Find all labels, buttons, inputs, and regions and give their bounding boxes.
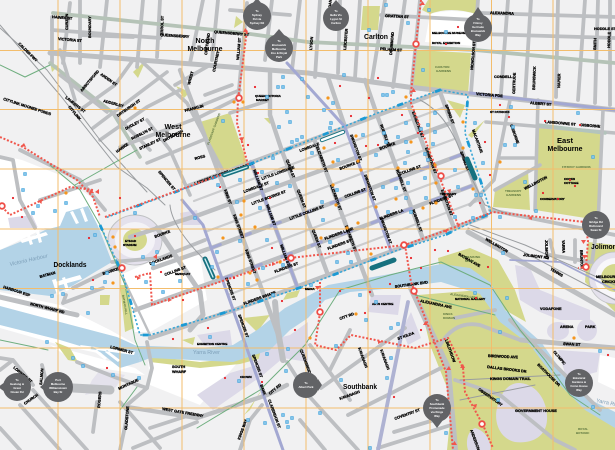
street names CBD cross: WILLIAM ST xyxy=(252,169,264,192)
route: St Kilda Road xyxy=(405,245,453,450)
venue names: COTTAGE xyxy=(564,181,578,185)
red markers xyxy=(13,27,608,397)
park: Flagstaff Gardens xyxy=(200,113,247,170)
venue names: MARKET xyxy=(256,98,269,102)
roads: north horizontals xyxy=(50,10,615,110)
street names west: STANLEY ST xyxy=(139,137,162,151)
station: Parliament xyxy=(467,159,475,178)
pin: Williamstown: Geelong & xyxy=(10,382,24,386)
street names docklands and south xyxy=(3,237,615,450)
label: North Melbourne: Melbourne xyxy=(188,44,222,53)
pin: Lygon Street Carlton xyxy=(323,0,349,31)
street names CBD cross: WILLIAM ST xyxy=(265,204,277,227)
street names CBD cross: RUSSELL ST xyxy=(411,209,423,233)
street names west: CITYLINK MOONEE PONDS xyxy=(3,97,52,117)
label: West Melbourne: West xyxy=(164,122,182,131)
venue names: ROYAL EXHIBITION xyxy=(432,41,460,45)
venue names xyxy=(123,31,578,379)
street names docklands and south: LORIMER ST xyxy=(12,366,33,384)
pin: South Yarra: Gardens & xyxy=(572,380,586,384)
street names CBD long: FLINDERS ST xyxy=(274,261,299,274)
street names CBD long: LATROBE ST WEST xyxy=(194,170,230,186)
pin: Richmond: Swan St xyxy=(591,228,602,232)
street names north east: GRATTAN ST xyxy=(385,14,410,19)
pin: Richmond: Bridge Rd xyxy=(589,220,603,224)
street names CBD cross: SPENCER ST xyxy=(224,277,236,302)
route: William St north xyxy=(237,30,248,165)
street names docklands and south: QUEENSBRIDGE xyxy=(299,349,314,380)
street names docklands and south: KAVANAGH xyxy=(357,347,368,369)
pin: Williamstown: Ocean Rd xyxy=(10,390,24,394)
street names north east: NAPIER xyxy=(557,73,562,88)
park names: ROYAL xyxy=(578,427,588,431)
park: small reserves xyxy=(243,315,270,332)
street names west xyxy=(3,14,250,192)
stadium: MCG xyxy=(589,252,615,304)
pin: Lygon Street Carlton: Carlton xyxy=(331,21,341,25)
street names docklands and south: LINLITHGOW xyxy=(444,339,456,363)
pin: Lygon Street: Park xyxy=(276,55,282,59)
pin: Port Melbourne: Bay St xyxy=(54,390,62,394)
street names north east: ALBERT ST xyxy=(530,101,552,107)
street names docklands and south: KINGS WAY xyxy=(237,418,248,440)
pin: Port Melbourne xyxy=(40,372,73,402)
pin: Lygon Street: Melbourne xyxy=(272,47,287,51)
street names CBD cross: EXHIBITION ST xyxy=(440,189,454,217)
park: Birrarung Marr xyxy=(438,248,526,322)
park names: FLAGSTAFF GARDENS xyxy=(206,113,221,145)
street names CBD long: LA TROBE ST xyxy=(229,161,255,174)
venue names: NATIONAL GALLERY xyxy=(455,297,485,301)
route: Docklands south xyxy=(2,187,93,215)
route: Treasury to Jolimont xyxy=(458,212,588,268)
station: Melbourne Central xyxy=(322,132,343,140)
label: North Melbourne: North xyxy=(196,36,215,45)
venue names: CROWN xyxy=(240,375,252,379)
route: Carlton and Exhibition xyxy=(411,0,458,225)
park names: GARDENS xyxy=(436,69,451,73)
street names CBD cross: EXHIBITION ST xyxy=(424,147,438,175)
street names docklands and south: SOUTHBANK BVD xyxy=(395,280,428,289)
street names CBD long: COLLINS ST xyxy=(344,187,367,199)
pin: Williamstown: To xyxy=(15,378,19,382)
street names north east: GISBORNE xyxy=(580,123,601,129)
street names CBD cross: SPENCER ST xyxy=(251,354,263,379)
street names west: FRANKLIN xyxy=(184,104,204,113)
street names west: ADDERLEY xyxy=(103,99,124,108)
street names CBD cross: ELIZABETH ST xyxy=(315,146,328,174)
pin: Lygon Street Carlton: Bella Vis xyxy=(330,13,342,17)
street names CBD cross: QUEEN ST xyxy=(296,189,307,209)
park: Yarra Park xyxy=(585,242,615,312)
pin: Lygon Street Carlton: Lygon St xyxy=(330,17,342,21)
venue names: TREASURY xyxy=(440,192,456,196)
street names west: CITYLINK xyxy=(67,105,82,121)
venue names: MEDIA xyxy=(305,287,316,291)
street names docklands and south: MONTAGUE xyxy=(118,378,140,391)
street names docklands and south: GOVERNMENT HOUSE xyxy=(515,409,557,413)
street names west: CHETWYND xyxy=(204,33,211,55)
pin: Albert Park: To xyxy=(304,381,308,385)
park: Argyle Square xyxy=(361,6,380,30)
pin: Albert Park xyxy=(293,372,322,398)
pin: Smith Street: Fitzroy xyxy=(473,21,483,25)
label: North Melbourne xyxy=(188,36,222,53)
street names north east: ALEXANDRA xyxy=(490,11,514,16)
park names: BOTANIC xyxy=(576,431,590,435)
street names docklands and south: CITY RD xyxy=(268,383,282,396)
street names docklands and south: OLYMPIC xyxy=(552,350,566,366)
street names west: LAURENS ST xyxy=(64,96,86,114)
pin: St Kilda xyxy=(423,394,451,428)
street names north east: VICTORIA PDE xyxy=(476,92,503,98)
street names docklands and south: JOLIMONT xyxy=(544,240,549,260)
street names west: DUDLEY ST xyxy=(125,117,146,131)
street names docklands and south: WEST GATE FREEWAY xyxy=(162,407,204,418)
label: Yarra River: Yarra River xyxy=(193,350,220,356)
pin: St Kilda: Promenade xyxy=(429,406,445,410)
street names docklands and south: VODAFONE xyxy=(540,307,562,311)
street names north east: LYGON xyxy=(309,36,314,50)
park: Carlton Gardens north xyxy=(422,0,478,14)
street names west: DRYBURGH ST xyxy=(116,98,142,118)
lilac precinct zones xyxy=(8,210,600,450)
roads: West Melbourne xyxy=(50,50,270,195)
pin: St Kilda: Southbank xyxy=(430,402,445,406)
street names docklands and south: BRUNTON xyxy=(579,250,584,269)
pin: South Yarra: Como House xyxy=(570,384,588,388)
lake: Government House grounds xyxy=(496,383,547,442)
street names CBD long: LITTLE BOURKE ST xyxy=(251,190,287,206)
street names docklands and south: YARRA xyxy=(561,240,565,253)
street names north east: HODDLE xyxy=(607,31,612,48)
venue names: COOKS xyxy=(564,177,575,181)
street names CBD long xyxy=(154,141,454,306)
street names north east: MACARTHUR xyxy=(471,129,483,154)
street names CBD long: LONSDALE ST xyxy=(243,181,270,194)
street names CBD cross: SWANSTON ST xyxy=(363,174,377,202)
street names CBD long: BOURKE xyxy=(154,229,171,239)
water: Victoria Harbour and Yarra River xyxy=(0,206,615,428)
street names CBD cross: RUSSELL ST xyxy=(395,169,407,193)
pin: Lygon Street Carlton: To xyxy=(334,9,338,13)
roads: CBD cross streets xyxy=(180,70,486,340)
lilac sports blocks xyxy=(515,265,590,320)
street names docklands and south: JOLIMONT RD xyxy=(523,253,550,260)
roads: Docklands xyxy=(0,150,205,335)
street names north east: CONDELL xyxy=(494,75,513,79)
pin: Richmond: Richmond xyxy=(589,224,603,228)
street names CBD cross: KING ST xyxy=(223,189,232,205)
street names docklands and south: LORIMER ST xyxy=(110,345,134,355)
route: La Trobe xyxy=(105,165,248,217)
street names west: BOUNDARY xyxy=(88,16,92,38)
street names west: ERROL ST xyxy=(160,15,165,35)
street names docklands and south: WHARF xyxy=(172,370,187,374)
water labels xyxy=(9,253,615,410)
street names CBD long: LITTLE COLLINS ST xyxy=(289,204,325,221)
street names CBD long: FLINDERS WHARF xyxy=(243,290,277,306)
pin: Sydney Road xyxy=(243,0,271,30)
park names: DOMAIN xyxy=(443,316,455,320)
pin: St Kilda: Way xyxy=(434,414,440,418)
street names west: VICTORIA ST xyxy=(58,37,83,43)
pin: Sydney Road: Sydney Rd xyxy=(250,21,265,25)
pin: Smith Street: Way xyxy=(475,33,481,37)
pin: Richmond xyxy=(582,211,610,239)
street names docklands and south: ARENA xyxy=(560,325,574,329)
street names west: COURTNEY xyxy=(212,50,221,72)
pin: Smith Street xyxy=(464,7,492,42)
street names west: ABBOTSFORD xyxy=(80,69,100,93)
street names CBD cross: CLARENDON ST xyxy=(267,399,281,429)
street names docklands and south: ALEXANDRA AVE xyxy=(420,299,453,310)
park: Carlton Gardens xyxy=(413,50,471,95)
street names north east: GERTRUDE xyxy=(512,72,517,94)
street names CBD cross: ELIZABETH ST xyxy=(329,184,342,212)
street names north east: LANSDOWNE ST xyxy=(545,120,577,127)
street names west: WILLIAM ST xyxy=(236,37,242,60)
street names CBD cross: WILLIAM ST xyxy=(279,244,291,267)
street names west: QUEENSBERRY ST xyxy=(214,30,250,37)
place names xyxy=(54,32,615,391)
street names west: SPENCER ST xyxy=(157,170,176,192)
pin: Richmond: To xyxy=(594,216,598,220)
pin: Port Melbourne: Port xyxy=(55,378,61,382)
street names docklands and south: BANK xyxy=(259,384,267,396)
park names xyxy=(121,65,591,435)
street names docklands and south: BATMAN AVE xyxy=(458,252,481,268)
street names CBD cross: SPENCER ST xyxy=(237,314,249,339)
pin: South Yarra: Botanical xyxy=(573,376,586,380)
venue names: STADIUM xyxy=(123,243,137,247)
street names CBD long: BOURKE xyxy=(379,141,396,151)
street names docklands and south: BOATHOUSE DR xyxy=(536,363,561,387)
street names docklands and south: DOCKLANDS xyxy=(149,254,174,266)
street names west: ARDEN ST xyxy=(99,73,118,87)
venue names: CONSERVATORY xyxy=(540,197,565,201)
street names CBD long: COLLINS ST xyxy=(399,164,422,176)
street names docklands and south: KINGS DOMAIN TRAIL xyxy=(490,377,531,381)
pin: Smith Street: To xyxy=(476,17,480,21)
street names west: CURZON xyxy=(65,14,69,30)
route: Docklands loop xyxy=(0,137,100,217)
route: Collins west xyxy=(135,225,461,305)
venue names: ETIHAD xyxy=(125,239,137,243)
park names: CARLTON xyxy=(435,65,449,69)
pin: Smith Street: Gertrude xyxy=(472,25,484,29)
pin: South Yarra: Way xyxy=(576,388,582,392)
street names CBD long: LITTLE LONSDALE xyxy=(261,165,295,181)
street names CBD long: FLINDERS LA xyxy=(379,209,404,221)
pin: Port Melbourne: Melbourne xyxy=(51,382,66,386)
street names CBD cross: KING STREET xyxy=(244,249,257,275)
street names north east: WELLINGTON xyxy=(524,175,548,191)
pin: Smith Street: Brunswick xyxy=(471,29,486,33)
street names west: WREST xyxy=(187,70,195,85)
park names: BIRRARUNG xyxy=(462,255,481,259)
street names docklands and south: SOUTH xyxy=(172,365,186,369)
street names docklands and south: TENNIS xyxy=(550,267,564,278)
street names CBD cross: RUSSELL ST xyxy=(379,124,391,148)
pin: St Kilda: via Kings xyxy=(431,410,444,414)
street names docklands and south: NORTH WHARF RD xyxy=(30,302,65,315)
street names docklands and south: KAVANAGH xyxy=(379,349,390,371)
roads: North Melbourne and Carlton verticals xyxy=(52,0,610,105)
street names west: QUEENSBERRY xyxy=(160,33,190,39)
street names north east: BRUNSWICK xyxy=(532,66,537,90)
street names CBD long: BOURKE ST xyxy=(339,159,362,171)
park: river south strip xyxy=(150,340,275,368)
roads: CBD long streets xyxy=(130,92,486,338)
route: Southbank loop xyxy=(315,282,493,448)
label: Southbank: Southbank xyxy=(343,382,378,391)
street names CBD cross: QUEEN ST xyxy=(311,229,322,249)
street names docklands and south: DALLAS BROOKS DR xyxy=(487,365,527,374)
street names west: HAWKE xyxy=(115,142,130,154)
street names docklands and south: BOURKE xyxy=(102,267,119,276)
street names CBD cross: SPRING ST xyxy=(459,151,470,172)
park names: FITZROY GARDENS xyxy=(562,165,591,169)
lake: Domain lilac south xyxy=(467,428,491,450)
roads: CBD little streets xyxy=(194,107,480,295)
street names docklands and south: ROGERS xyxy=(97,391,102,408)
pin: Williamstown: Great xyxy=(13,386,21,390)
street names west: CALDER FWY xyxy=(17,42,38,63)
street names north east: LEICESTER xyxy=(343,28,349,50)
pin: Lygon Street: Zoo & Royal xyxy=(271,51,287,55)
street names CBD cross: SPRING ST xyxy=(444,104,455,125)
street names CBD cross: KING STREET xyxy=(232,214,245,240)
street names CBD cross: SWANSTON ST xyxy=(349,134,363,162)
street names north east: SMITH xyxy=(593,38,597,50)
station: Southern Cross xyxy=(205,259,213,277)
label: East Melbourne: East xyxy=(557,136,573,145)
pin: Sydney Road: Rd via xyxy=(253,17,262,21)
park names: ALEXANDRA GDNS xyxy=(450,292,478,300)
street names CBD long: FLINDERS ST xyxy=(429,193,454,206)
street names docklands and south: SWAN ST xyxy=(563,342,581,347)
label: East Melbourne: Melbourne xyxy=(548,144,582,153)
park names: GARDENS xyxy=(506,193,521,197)
pin: St Kilda: To xyxy=(435,398,439,402)
pin: South Yarra: To xyxy=(577,372,581,376)
pin: Albert Park: Albert Park xyxy=(299,385,314,389)
street names CBD long: LONSDALE xyxy=(299,142,320,153)
pin: Lygon Street: To xyxy=(277,39,281,43)
street names docklands and south: CHURCH xyxy=(23,393,39,406)
orange markers xyxy=(66,97,574,338)
street names north east: GISBORNE xyxy=(509,124,520,145)
street names docklands and south: KAVANAGH xyxy=(339,390,361,401)
street names CBD cross: EXHIBITION ST xyxy=(411,111,425,139)
station: Flinders Street xyxy=(372,260,394,268)
tram route: City Circle blue dashes xyxy=(100,90,491,335)
park names: KINGS xyxy=(443,312,453,316)
street names docklands and south: COVENTRY ST xyxy=(394,408,421,421)
green paths xyxy=(0,65,600,428)
pin: South Yarra xyxy=(565,369,593,397)
label: Victoria Harbour: Victoria Harbour xyxy=(9,253,49,268)
street names docklands and south: PARK xyxy=(585,325,596,329)
street names docklands and south: GLADSTONE xyxy=(124,406,130,430)
pin: Sydney Road: To xyxy=(255,9,259,13)
street names north east: PELHAM ST xyxy=(380,47,403,53)
pin: Lygon Street: Brunswick xyxy=(272,43,287,47)
label: Docklands: Docklands xyxy=(54,260,86,269)
venue names: NEWQUAY xyxy=(175,272,190,276)
roads: south west xyxy=(0,342,287,450)
label: Carlton: Carlton xyxy=(364,32,388,41)
street names north east: DRUMMOND xyxy=(389,32,395,55)
venue names: ST PATRICKS xyxy=(490,110,510,114)
station: Flagstaff xyxy=(224,167,247,175)
park: Kings Domain xyxy=(418,290,615,450)
street names docklands and south: WELLINGTON xyxy=(484,237,509,254)
street names docklands and south: CITY RD xyxy=(339,312,355,321)
stadium: Etihad xyxy=(108,215,162,265)
pin: Williamstown xyxy=(0,373,31,401)
venue names: QUEEN VICTORIA xyxy=(255,94,282,98)
street names docklands and south: OBSERVATORY xyxy=(477,388,503,407)
street names CBD long: COLLINS ST xyxy=(164,265,187,277)
label: West Melbourne: Melbourne xyxy=(156,130,190,139)
street names CBD cross xyxy=(223,104,470,429)
park: Treasury Gardens xyxy=(493,170,530,210)
street names west: DRYBURGH xyxy=(163,129,184,143)
street names west: HAINES ST xyxy=(52,15,73,21)
park names: TREASURY xyxy=(505,189,521,193)
street names docklands and south: HARBOUR ESP xyxy=(3,285,31,298)
pin: Port Melbourne: Williamstown xyxy=(49,386,67,390)
pin: Lygon Street xyxy=(265,29,293,62)
street names north east xyxy=(309,0,615,191)
label: West Melbourne xyxy=(156,122,190,139)
venue names: ARTS CENTRE xyxy=(372,302,393,306)
street names CBD cross: SWANSTON ST xyxy=(379,217,393,245)
street names docklands and south: SALMON xyxy=(39,368,44,385)
venue names: EXHIBITION CENTRE xyxy=(197,342,227,346)
street names docklands and south: BATMAN xyxy=(39,271,56,279)
label: East Melbourne xyxy=(548,136,582,153)
roads: tram corridors in lilac xyxy=(182,63,615,450)
street names CBD long: FLINDERS ST xyxy=(327,238,352,251)
street names CBD cross: ELIZABETH ST xyxy=(344,225,357,253)
park names: BATMAN HILL xyxy=(121,294,129,315)
venue names: MELBOURNE MUSEUM xyxy=(432,31,466,35)
street names docklands and south: BIRDWOOD AVE xyxy=(488,354,519,360)
street names CBD long: FLINDERS LANE xyxy=(324,227,354,241)
street names CBD cross: QUEEN ST xyxy=(285,159,296,179)
street names west: ROSSLYN ST xyxy=(131,126,154,141)
roads: Southbank xyxy=(240,210,615,450)
roads: East Melbourne xyxy=(470,100,615,225)
street names west: ROSS xyxy=(194,154,206,161)
park names: MARR xyxy=(465,259,475,263)
park: Fitzroy Gardens xyxy=(535,128,603,220)
pin: Sydney Road: Sydney xyxy=(252,13,262,17)
street names north east: NICHOLSON ST xyxy=(470,40,477,70)
street names docklands and south: ST KILDA xyxy=(397,331,415,341)
docks: harbour piers xyxy=(20,208,135,362)
